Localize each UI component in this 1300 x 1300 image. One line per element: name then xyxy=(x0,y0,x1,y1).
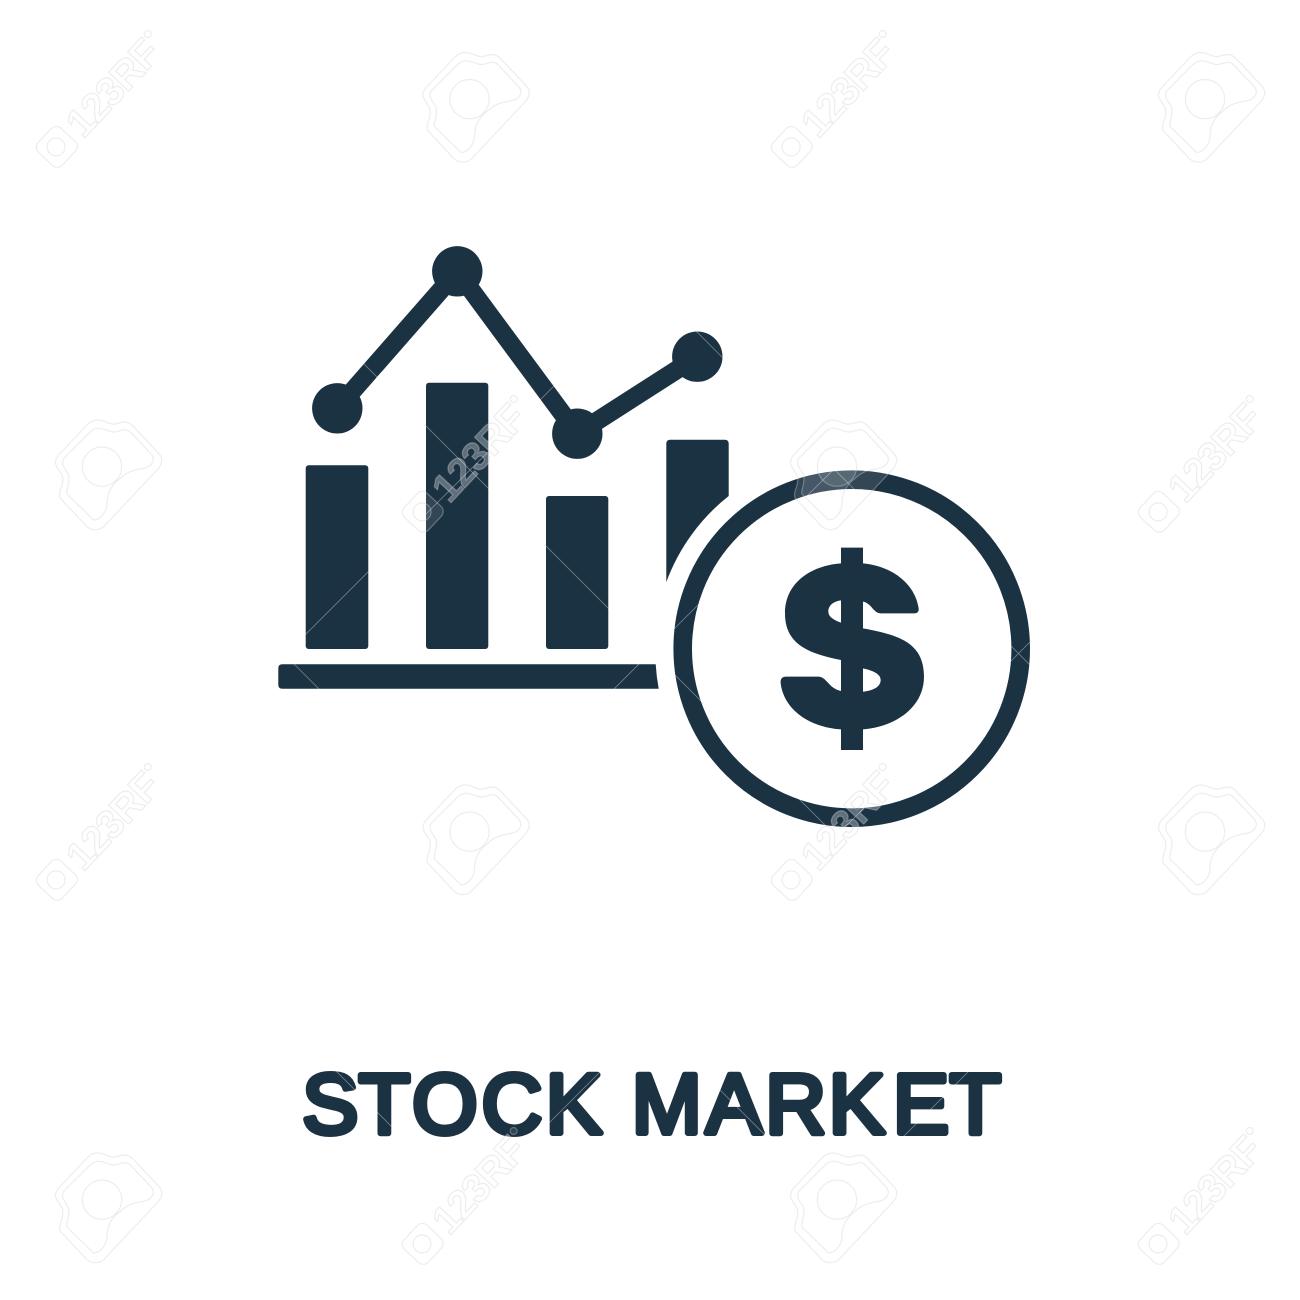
watermark: 123RF stamp xyxy=(766,25,910,175)
watermark: camera stamp xyxy=(1158,785,1265,895)
icon: dollar coin xyxy=(683,480,1021,818)
watermark: 123RF stamp: 123RF xyxy=(793,32,903,146)
icon: bar chart with line and dollar coin xyxy=(278,246,1021,818)
title: STOCK MARKET xyxy=(302,1057,1001,1151)
watermark: camera stamp xyxy=(790,1153,897,1263)
watermark: camera stamp xyxy=(423,785,529,895)
chart baseline xyxy=(278,664,659,689)
watermark: 123RF stamp xyxy=(397,1122,541,1272)
watermark: 123RF stamp: 123RF xyxy=(1160,1129,1270,1243)
watermark: 123RF stamp xyxy=(766,758,910,908)
watermark: 123RF stamp: 123RF xyxy=(424,1129,534,1243)
watermark: 123RF stamp xyxy=(397,390,541,540)
watermark: 123RF stamp: 123RF xyxy=(424,397,534,511)
watermark: camera stamp xyxy=(55,1153,162,1263)
watermark: camera stamp xyxy=(423,52,529,162)
watermark: 123RF stamp xyxy=(31,758,175,908)
watermark: camera stamp xyxy=(790,420,897,530)
bar chart xyxy=(306,383,729,649)
watermark: 123RF stamp xyxy=(31,25,175,175)
watermark: camera stamp xyxy=(55,420,162,530)
watermark: 123RF stamp: 123RF xyxy=(793,765,903,879)
watermark: 123RF stamp: 123RF xyxy=(58,765,168,879)
watermark: camera stamp xyxy=(1158,52,1265,162)
line chart xyxy=(312,246,722,459)
watermark: 123RF stamp xyxy=(1133,390,1277,540)
watermark: 123RF stamp: 123RF xyxy=(1160,397,1270,511)
watermark: 123RF stamp xyxy=(1133,1122,1277,1272)
watermark: 123RF stamp: 123RF xyxy=(58,32,168,146)
